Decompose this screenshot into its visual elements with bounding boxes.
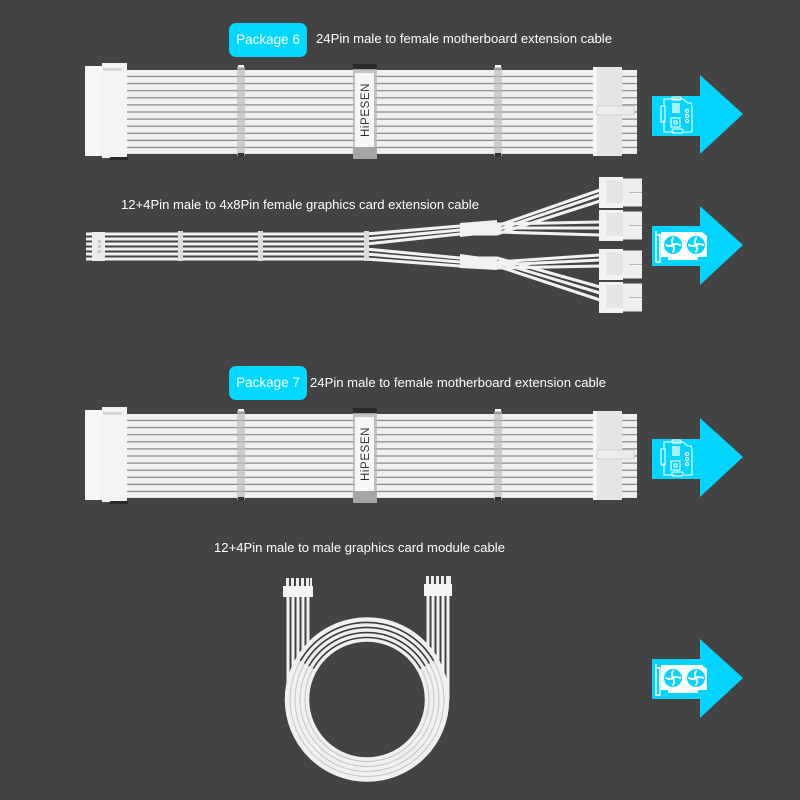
cable: 24Pin motherboard extension, package 7 xyxy=(85,407,637,504)
cable: 12+4Pin to 4x8Pin graphics card extension xyxy=(86,177,642,313)
arrow with graphics card icon, module cable xyxy=(652,639,743,718)
cable: 24Pin motherboard extension, package 6 xyxy=(85,63,637,160)
cable: coiled 12+4Pin module cable xyxy=(283,576,452,776)
heading: 24Pin extension cable, package 6: 24Pin male to female motherboard extension cable xyxy=(316,31,612,46)
heading: 12+4Pin to 4x8Pin cable: 12+4Pin male to 4x8Pin female graphics card extension cable xyxy=(121,197,479,212)
heading: 24Pin extension cable, package 7: 24Pin male to female motherboard extension cable xyxy=(310,375,606,390)
heading: 12+4Pin male to male cable: 12+4Pin male to male graphics card module cable xyxy=(214,540,505,555)
arrow with graphics card icon xyxy=(652,206,743,285)
badge: Package 6: Package 6 xyxy=(236,32,300,47)
badge: Package 7 xyxy=(229,366,307,400)
arrow with motherboard icon, package 7 xyxy=(652,418,743,497)
cable: 24Pin motherboard extension, package 6: HiPESEN xyxy=(360,83,372,137)
badge: Package 6 xyxy=(229,23,307,57)
badge: Package 7: Package 7 xyxy=(236,375,300,390)
cable: 24Pin motherboard extension, package 7: HiPESEN xyxy=(360,427,372,481)
arrow with motherboard icon, package 6 xyxy=(652,75,743,154)
